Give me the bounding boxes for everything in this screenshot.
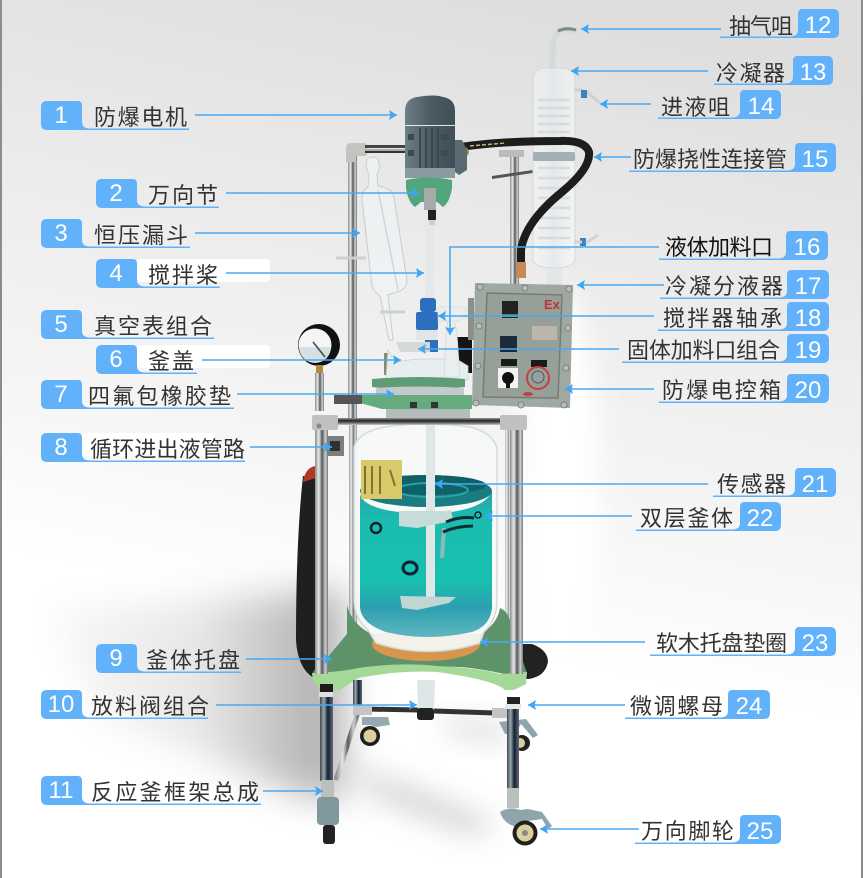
label 22 <box>485 502 781 532</box>
glass neck assemblies <box>386 298 474 380</box>
Ex mark: Ex <box>544 297 561 312</box>
label 9: 9 <box>109 645 123 672</box>
bag hose behind frame <box>296 466 326 680</box>
label 7 <box>41 380 394 409</box>
label 16 <box>450 231 828 335</box>
label 23 <box>480 627 836 657</box>
label 15 <box>594 143 836 173</box>
label 20: 防爆电控箱 <box>662 378 781 403</box>
label 17: 17 <box>795 273 821 300</box>
label 14: 14 <box>748 93 774 120</box>
label 23: 软木托盘垫圈 <box>656 631 787 656</box>
label 21 <box>435 468 836 498</box>
label 4 <box>96 259 424 288</box>
label 13: 冷凝器 <box>716 61 785 86</box>
label 5: 5 <box>54 311 68 338</box>
label 25: 25 <box>747 818 773 845</box>
label 3: 3 <box>54 220 68 247</box>
explosion proof control box <box>472 283 573 408</box>
box displays <box>500 301 557 367</box>
label 17 <box>577 270 829 300</box>
reactor machine illustration <box>296 29 600 845</box>
label 16: 液体加料口 <box>665 235 773 260</box>
constant pressure funnel <box>336 157 407 375</box>
label 18: 搅拌器轴承 <box>663 306 782 331</box>
label 2: 2 <box>109 180 123 207</box>
label 19 <box>418 334 829 364</box>
back uprights <box>346 143 533 650</box>
label 14: 进液咀 <box>661 95 730 120</box>
label 16: 16 <box>794 234 820 261</box>
label 24 <box>528 690 770 720</box>
label 23: 23 <box>802 630 828 657</box>
universal joint <box>406 178 452 226</box>
label 20 <box>565 374 829 404</box>
label 10 <box>41 690 417 719</box>
circulation valve <box>327 436 344 456</box>
label 3: 恒压漏斗 <box>94 223 188 248</box>
label 11 <box>41 776 323 805</box>
label 4: 搅拌桨 <box>148 263 218 288</box>
label 24: 微调螺母 <box>630 694 723 719</box>
label 11: 反应釜框架总成 <box>91 780 259 805</box>
legs and wheels <box>317 680 552 846</box>
lid green flanges <box>334 377 472 419</box>
label 7: 7 <box>54 381 68 408</box>
label 2 <box>96 179 419 208</box>
label 6: 6 <box>109 346 123 373</box>
label 7: 四氟包橡胶垫 <box>88 384 231 409</box>
label 10: 放料阀组合 <box>91 694 209 719</box>
label 1 <box>41 101 397 130</box>
label 12: 12 <box>805 12 831 39</box>
label 1: 1 <box>54 102 68 129</box>
label 5 <box>41 310 214 339</box>
label 6: 釜盖 <box>148 349 194 374</box>
label 13 <box>571 56 833 86</box>
label 1: 防爆电机 <box>94 105 187 130</box>
label 19: 19 <box>795 337 821 364</box>
label 6 <box>96 345 401 374</box>
pressure gauge <box>298 324 340 411</box>
label 22: 双层釜体 <box>640 506 733 531</box>
label 22: 22 <box>747 505 773 532</box>
label 21: 传感器 <box>717 472 786 497</box>
label 25: 万向脚轮 <box>641 819 734 844</box>
label 19: 固体加料口组合 <box>627 338 780 363</box>
label 2: 万向节 <box>148 183 218 208</box>
label 11: 11 <box>49 777 73 804</box>
label 3 <box>41 219 360 248</box>
label 12 <box>581 9 839 39</box>
front uprights and crossbar <box>312 415 527 674</box>
label 4: 4 <box>109 260 123 287</box>
bearing blue <box>416 298 438 352</box>
label 17: 冷凝分液器 <box>665 274 783 299</box>
label 8: 循环进出液管路 <box>90 437 245 462</box>
label 15: 防爆挠性连接管 <box>633 147 787 172</box>
label 14 <box>600 90 781 120</box>
label 9 <box>96 644 332 673</box>
label 25 <box>540 815 781 845</box>
label 24: 24 <box>736 693 762 720</box>
label 8 <box>41 433 332 462</box>
label 20: 20 <box>795 377 821 404</box>
label 12: 抽气咀 <box>729 14 793 39</box>
rotary switch <box>498 368 518 388</box>
explosion proof hose <box>459 141 589 278</box>
label 5: 真空表组合 <box>94 314 212 339</box>
black wheel behind tray <box>516 644 548 679</box>
stirrer shaft upper <box>425 225 434 300</box>
cork tray ring and tray <box>312 605 527 690</box>
condenser <box>533 29 600 286</box>
label 15: 15 <box>802 146 828 173</box>
label 9: 釜体托盘 <box>146 648 240 673</box>
label 13: 13 <box>800 59 826 86</box>
label 21: 21 <box>802 471 828 498</box>
glass vessel <box>354 424 497 652</box>
motor <box>405 96 467 178</box>
label 8: 8 <box>54 434 68 461</box>
label 10: 10 <box>48 691 74 718</box>
red emergency knob <box>527 367 549 389</box>
label 18 <box>438 302 829 332</box>
label 18: 18 <box>795 305 821 332</box>
